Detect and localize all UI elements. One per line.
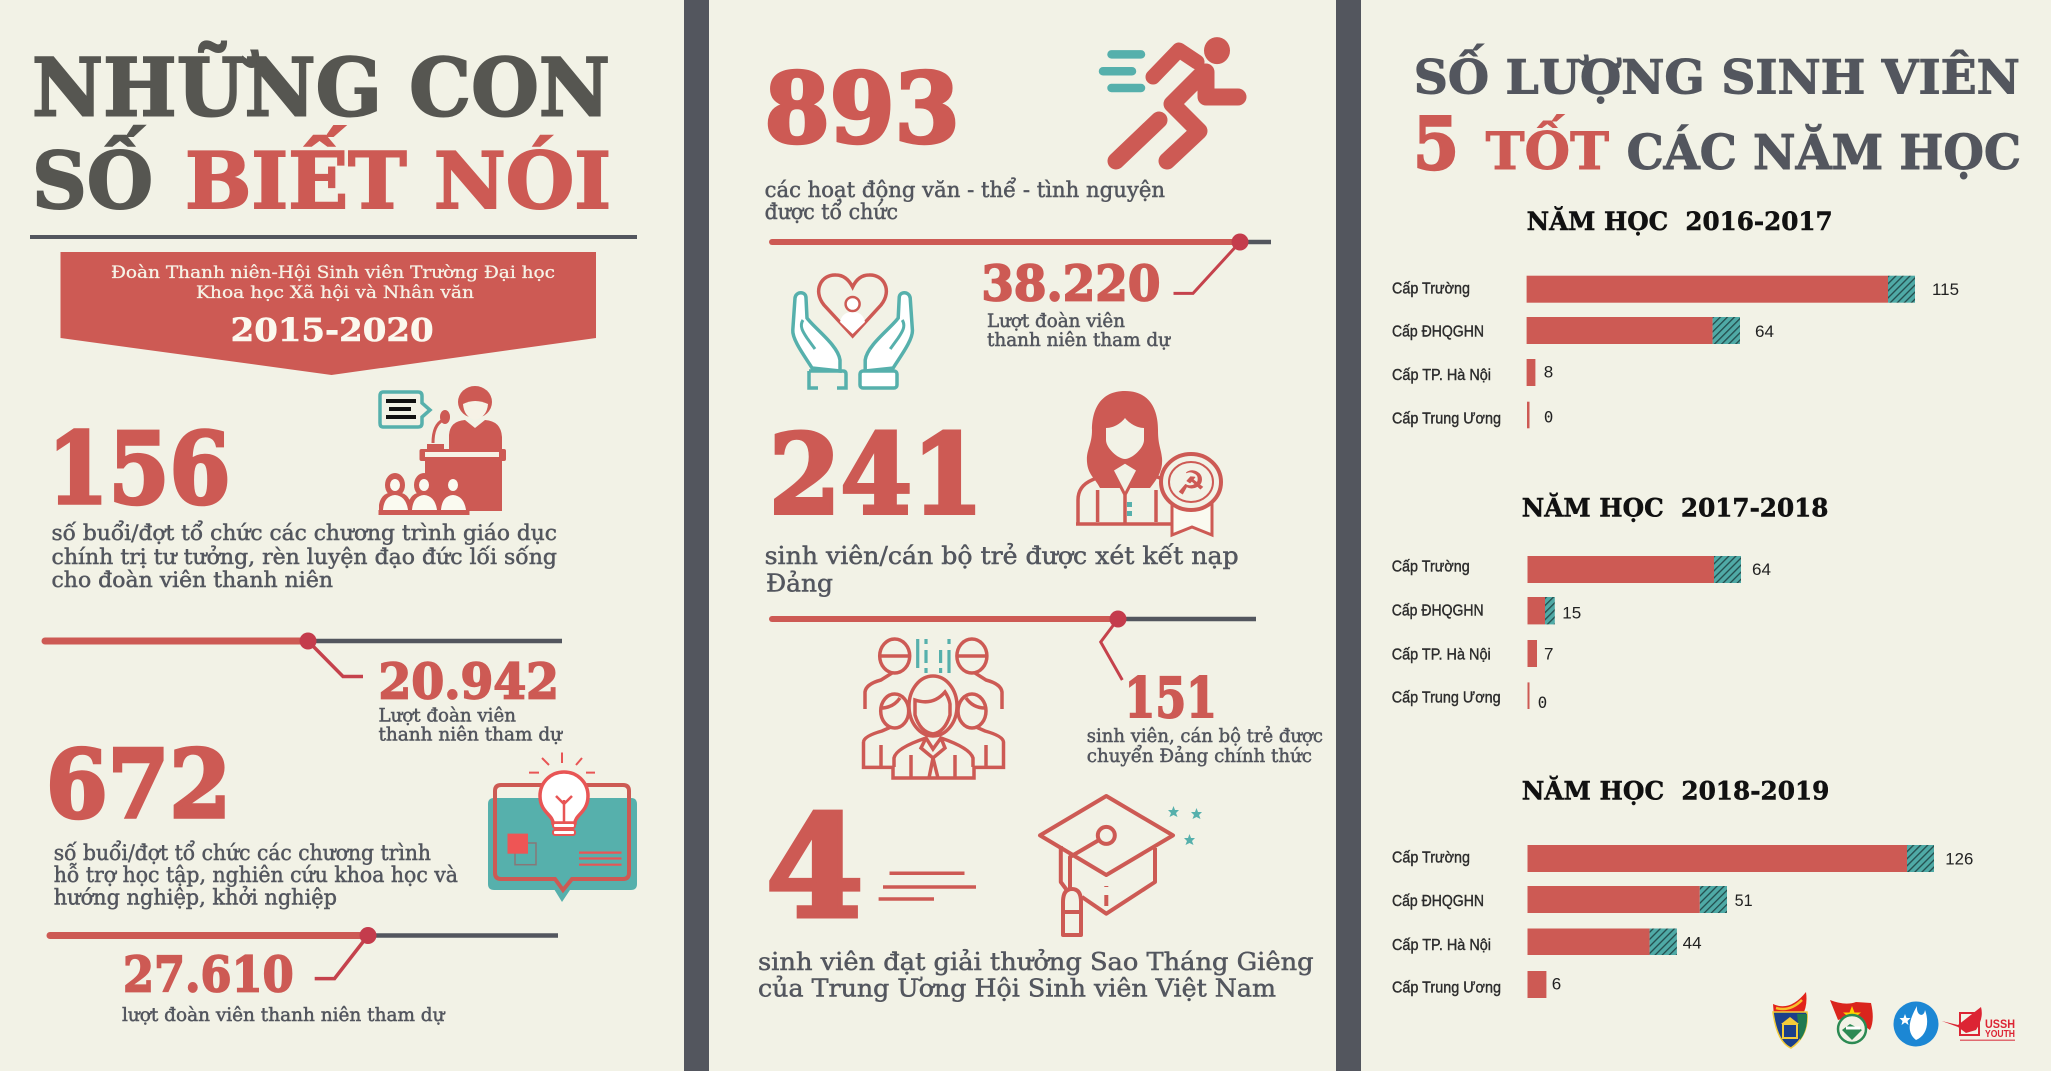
text: 156 description: số buổi/đợt tổ chức các chương trình giáo dục (52, 518, 557, 546)
bar chart: 2017-2018: 15 (1562, 604, 1581, 623)
text: 893 description (765, 178, 1165, 224)
logo: USSH Youth: YOUTH (1985, 1028, 2015, 1040)
stat 672: 672 (46, 730, 231, 840)
bar chart: 2016-2017: Cấp TP. Hà Nội (1392, 367, 1491, 384)
bar chart: 2017-2018: 64 (1752, 560, 1771, 579)
logo: university emblem (1773, 992, 1807, 1048)
stat 156: 156 (48, 412, 230, 527)
bar chart: 2016-2017: Cấp ĐHQGHN (1392, 324, 1484, 341)
text: 893 description: được tổ chức (765, 200, 898, 224)
text: 156 description: chính trị tư tưởng, rèn luyện đạo đức lối sống (52, 544, 557, 570)
text: 27.610 description: lượt đoàn viên thanh niên tham dự (122, 1005, 446, 1026)
stat 241: 241 (769, 410, 984, 539)
bar chart: 2017-2018: NĂM HỌC 2017-2018 (1522, 494, 1828, 523)
bar chart: 2018-2019: 126 (1945, 850, 1973, 868)
panel: right column (1392, 43, 2021, 1048)
title: SỐ (32, 125, 153, 227)
text: 893 description: các hoạt động văn - thể - tình nguyện (765, 178, 1165, 202)
bar chart: 2018-2019: 6 (1552, 975, 1561, 994)
stat 27.610: 27.610 (123, 946, 294, 1004)
bar chart: 2016-2017 (1392, 207, 1959, 428)
icon: speaker at podium (378, 386, 506, 515)
bar chart: 2017-2018: Cấp Trường (1392, 559, 1470, 576)
bar chart: 2017-2018: Cấp ĐHQGHN (1392, 603, 1484, 620)
banner (60, 252, 596, 375)
divider with leader 20.942 (45, 632, 562, 676)
icon: woman with party medal (1076, 391, 1221, 535)
logo: student association (1894, 1002, 1938, 1046)
banner: Khoa học Xã hội và Nhân văn (196, 283, 474, 302)
icon: hands holding heart (793, 275, 912, 388)
icon: woman with party medal: ☭ (1177, 464, 1205, 502)
text: 4 description (758, 948, 1314, 1002)
stat 20.942: 20.942 (378, 652, 559, 710)
text: 672 description: hướng nghiệp, khởi nghiệp (54, 884, 337, 910)
text: 241 description (765, 542, 1239, 597)
text: 151 description: chuyển Đảng chính thức (1087, 745, 1312, 767)
bar chart: 2016-2017: 64 (1755, 322, 1774, 341)
logo: USSH Youth (1942, 1007, 2015, 1041)
text: 241 description: sinh viên/cán bộ trẻ được xét kết nạp (765, 542, 1239, 570)
bar chart: 2017-2018: 0 (1538, 693, 1547, 712)
stat 4: 4 (766, 786, 864, 950)
logo: USSH Youth: USSH (1985, 1019, 2015, 1031)
banner: 2015-2020 (231, 311, 434, 349)
title (32, 40, 611, 227)
stat 38.220: 38.220 (981, 255, 1160, 313)
bar chart: 2016-2017: 0 (1544, 408, 1553, 427)
title: BIẾT NÓI (185, 125, 611, 227)
text: 20.942 description: thanh niên tham dự (378, 724, 563, 746)
icon: group of people (864, 639, 1004, 778)
bar chart: 2016-2017: Cấp Trung Ương (1392, 410, 1501, 427)
text: 151 description (1087, 726, 1323, 767)
banner: Đoàn Thanh niên-Hội Sinh viên Trường Đại học (111, 263, 555, 282)
icon: graduation cap (1040, 796, 1202, 935)
text: 156 description (52, 518, 557, 593)
bar chart: 2018-2019: 51 (1735, 891, 1753, 910)
bar chart: 2016-2017: 8 (1544, 363, 1553, 382)
text: 38.220 description (987, 311, 1171, 351)
speed lines (879, 873, 976, 899)
divider with leader 38.220 (772, 234, 1271, 293)
text: 4 description: sinh viên đạt giải thưởng Sao Tháng Giêng (758, 948, 1314, 976)
bar chart: 2016-2017: NĂM HỌC 2016-2017 (1527, 207, 1833, 236)
right title: TỐT (1486, 115, 1609, 182)
bar chart: 2018-2019: Cấp Trường (1392, 850, 1470, 867)
stat 151: 151 (1124, 665, 1217, 730)
text: 20.942 description (378, 706, 563, 746)
right title: SỐ LƯỢNG SINH VIÊN (1414, 43, 2020, 105)
bar chart: 2017-2018 (1392, 494, 1828, 712)
bar chart: 2018-2019: 44 (1683, 934, 1702, 952)
text: 156 description: cho đoàn viên thanh niên (52, 568, 333, 593)
text: 38.220 description: thanh niên tham dự (987, 330, 1171, 351)
logo: youth union (1830, 1000, 1873, 1043)
bar chart: 2018-2019: Cấp ĐHQGHN (1392, 893, 1484, 910)
text: 151 description: sinh viên, cán bộ trẻ được (1087, 726, 1323, 747)
text: 20.942 description: Lượt đoàn viên (378, 706, 516, 726)
right title: CÁC NĂM HỌC (1627, 123, 2021, 181)
stat 893: 893 (765, 52, 960, 165)
bar chart: 2018-2019: NĂM HỌC 2018-2019 (1522, 777, 1829, 806)
text: 4 description: của Trung Ương Hội Sinh viên Việt Nam (758, 974, 1276, 1002)
bar chart: 2018-2019: Cấp Trung Ương (1392, 980, 1501, 997)
text: 38.220 description: Lượt đoàn viên (987, 311, 1125, 332)
bar chart: 2016-2017: Cấp Trường (1392, 280, 1470, 297)
right title: 5 (1413, 101, 1459, 186)
text: 672 description: hỗ trợ học tập, nghiên cứu khoa học và (54, 862, 458, 888)
bar chart: 2017-2018: Cấp TP. Hà Nội (1392, 646, 1491, 663)
bar chart: 2018-2019 (1392, 777, 1973, 998)
bar chart: 2017-2018: Cấp Trung Ương (1392, 689, 1501, 706)
divider with leader 27.610 (50, 927, 558, 979)
icon: runner (1103, 37, 1238, 161)
divider with leader 151 (772, 610, 1256, 680)
bar chart: 2016-2017: 115 (1932, 280, 1959, 299)
text: 241 description: Đảng (766, 569, 833, 597)
text: 672 description (54, 838, 458, 910)
logos row (1773, 992, 2015, 1048)
panel: middle column (758, 37, 1323, 1003)
right title (1413, 43, 2021, 186)
title: NHỮNG CON (32, 40, 610, 134)
icon: light bulb card (488, 752, 637, 902)
text: 672 description: số buổi/đợt tổ chức các chương trình (54, 838, 431, 866)
bar chart: 2017-2018: 7 (1544, 644, 1553, 663)
panel: left column (30, 40, 637, 1026)
bar chart: 2018-2019: Cấp TP. Hà Nội (1392, 937, 1491, 954)
